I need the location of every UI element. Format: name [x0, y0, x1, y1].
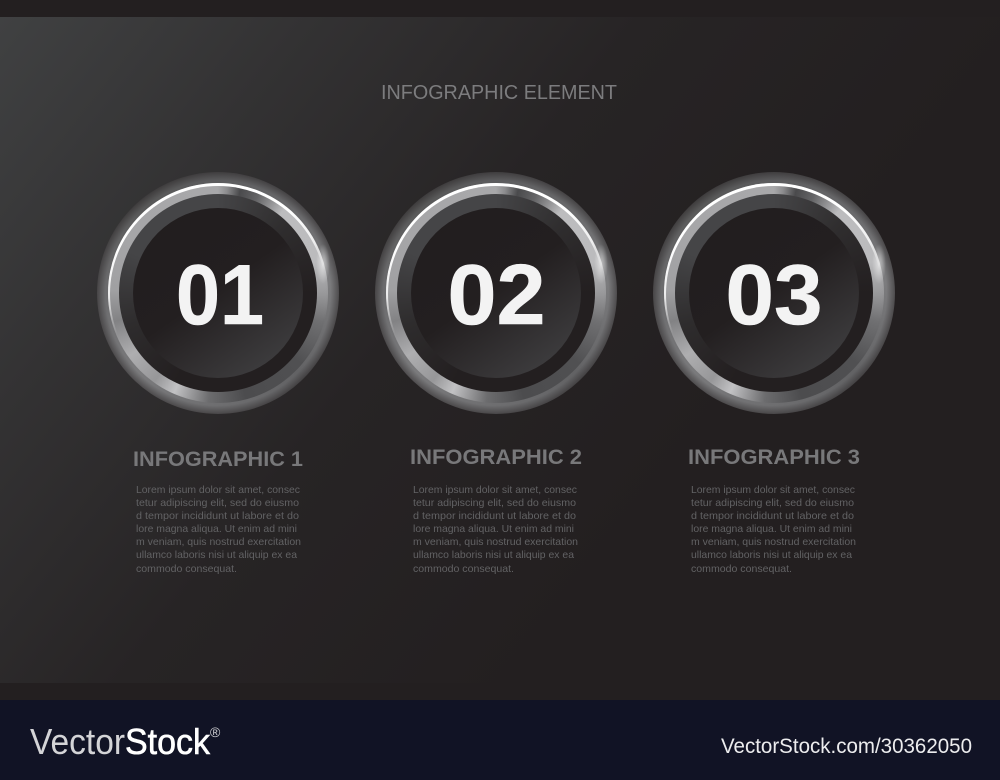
button: 01 — [97, 172, 339, 414]
text block 3: ullamco laboris nisi ut aliquip ex ea — [691, 550, 852, 561]
text block 1: ullamco laboris nisi ut aliquip ex ea — [136, 550, 297, 561]
text block 3: lore magna aliqua. Ut enim ad mini — [691, 524, 852, 535]
footer image id: VectorStock.com/30362050 — [721, 735, 972, 758]
text block 3: d tempor incididunt ut labore et do — [691, 511, 854, 522]
text block 1 — [136, 485, 301, 575]
button: 02 — [375, 172, 617, 414]
heading: infographic 1: INFOGRAPHIC 1 — [133, 448, 303, 471]
button: 01: 01 — [176, 248, 264, 343]
text block 2: commodo consequat. — [413, 564, 514, 575]
text block 1: lore magna aliqua. Ut enim ad mini — [136, 524, 297, 535]
text block 2: d tempor incididunt ut labore et do — [413, 511, 576, 522]
text block 3: m veniam, quis nostrud exercitation — [691, 537, 856, 548]
heading: infographic 3: INFOGRAPHIC 3 — [688, 446, 860, 469]
button: 03 — [653, 172, 895, 414]
watermark footer bar — [0, 700, 1000, 780]
text block 2: ullamco laboris nisi ut aliquip ex ea — [413, 550, 574, 561]
heading: infographic 2: INFOGRAPHIC 2 — [410, 446, 582, 469]
footer logo: Stock — [125, 721, 211, 762]
text block 2: lore magna aliqua. Ut enim ad mini — [413, 524, 574, 535]
text block 1: Lorem ipsum dolor sit amet, consec — [136, 485, 300, 496]
text block 3 — [691, 485, 856, 575]
text block 3: tetur adipiscing elit, sed do eiusmo — [691, 498, 854, 509]
text block 1: m veniam, quis nostrud exercitation — [136, 537, 301, 548]
footer logo — [30, 721, 221, 762]
footer logo: Vector — [30, 721, 125, 762]
text block 3: commodo consequat. — [691, 564, 792, 575]
text block 1: tetur adipiscing elit, sed do eiusmo — [136, 498, 299, 509]
text block 2: m veniam, quis nostrud exercitation — [413, 537, 578, 548]
footer logo: ® — [210, 724, 221, 740]
text block 3: Lorem ipsum dolor sit amet, consec — [691, 485, 855, 496]
text block 2: Lorem ipsum dolor sit amet, consec — [413, 485, 577, 496]
text block 2 — [413, 485, 578, 575]
title: INFOGRAPHIC ELEMENT — [381, 81, 617, 104]
button: 03: 03 — [726, 248, 822, 343]
text block 2: tetur adipiscing elit, sed do eiusmo — [413, 498, 576, 509]
text block 1: d tempor incididunt ut labore et do — [136, 511, 299, 522]
text block 1: commodo consequat. — [136, 564, 237, 575]
button: 02: 02 — [448, 248, 546, 343]
